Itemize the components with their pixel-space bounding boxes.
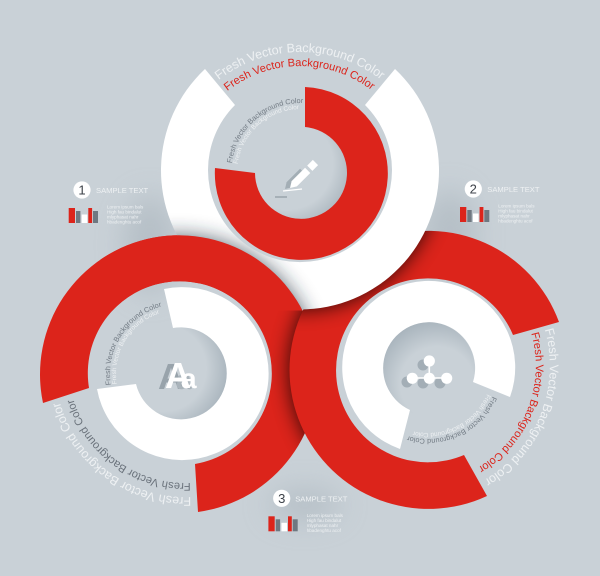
top inner light text: Fresh Vector Background Color — [234, 105, 299, 164]
top inner dark text: Fresh Vector Background Color — [226, 98, 304, 163]
description 3: hbadenghtu acof — [307, 528, 342, 533]
description 2: hbadenghtu acof — [498, 218, 533, 224]
number badge 2: 2 — [470, 182, 477, 197]
left white inner ring — [97, 287, 269, 460]
shadow of left ring on top ring — [170, 220, 318, 310]
label 1: SAMPLE TEXT — [96, 186, 149, 195]
right red text: Fresh Vector Background Color — [480, 332, 544, 472]
left inner dark text: Fresh Vector Background Color — [104, 302, 161, 385]
description 2: mlyphasat nahr — [498, 214, 530, 218]
legend 3 — [268, 490, 348, 533]
left red outer ring — [40, 235, 318, 512]
icon: Aa letters: A — [165, 355, 191, 396]
label 3: SAMPLE TEXT — [295, 494, 348, 503]
bars 2 — [460, 207, 489, 222]
panel: left circle — [40, 235, 305, 512]
right outer text: Fresh Vector Background Color — [486, 328, 558, 486]
label 2: SAMPLE TEXT — [487, 185, 540, 194]
left second text: Fresh Vector Background Color — [68, 400, 190, 491]
bars 3 — [268, 516, 298, 531]
description 2: Lorem ipsum bals — [498, 204, 535, 208]
shadow of top ring on right ring — [298, 230, 442, 325]
panel: right circle — [290, 230, 559, 509]
description 1: High fau bindalut — [107, 210, 142, 214]
description 1: mlyphasat nahr — [107, 214, 139, 220]
description 3: Lorem ipsum bals — [307, 513, 344, 518]
icon: molecule — [402, 355, 452, 388]
top outer text: Fresh Vector Background Color — [214, 43, 384, 80]
left outer text: Fresh Vector Background Color — [54, 404, 190, 506]
panel: top circle — [161, 43, 439, 310]
right inner light text: Fresh Vector Background Color — [412, 394, 491, 438]
top center hollow — [254, 126, 348, 220]
description 1: Lorem ipsum bals — [107, 204, 144, 210]
bars 1 — [69, 208, 98, 223]
right white inner ring — [342, 281, 515, 449]
number badge 1: 1 — [78, 183, 86, 198]
number badge 3: 3 — [278, 491, 285, 506]
left inner light text: Fresh Vector Background Color — [112, 310, 158, 384]
left ring overlap over top ring — [100, 235, 302, 310]
shadow of right ring on left ring — [274, 310, 305, 449]
left center hollow — [133, 326, 227, 420]
icon: Aa letters: a — [176, 364, 192, 395]
legend 2 — [460, 180, 540, 224]
icon: Aa letters: A — [158, 356, 184, 397]
description 3: mlyphasat nahr — [307, 523, 339, 528]
top red inner ring — [215, 87, 388, 260]
description 1: hbadenghtu acof — [107, 220, 142, 224]
icon: Aa letters: a — [181, 363, 197, 394]
top red text: Fresh Vector Background Color — [224, 58, 375, 90]
right center hollow — [381, 322, 475, 416]
top white outer ring — [161, 69, 439, 309]
icon: pencil — [275, 160, 318, 197]
description 2: High fau bindalut — [498, 208, 534, 214]
right inner dark text: Fresh Vector Background Color — [406, 396, 497, 444]
legend 1 — [69, 181, 149, 224]
right red outer ring — [290, 231, 559, 509]
background shading — [124, 190, 476, 521]
description 3: High fau bindalut — [307, 518, 342, 523]
icon: Aa letters — [158, 355, 197, 397]
